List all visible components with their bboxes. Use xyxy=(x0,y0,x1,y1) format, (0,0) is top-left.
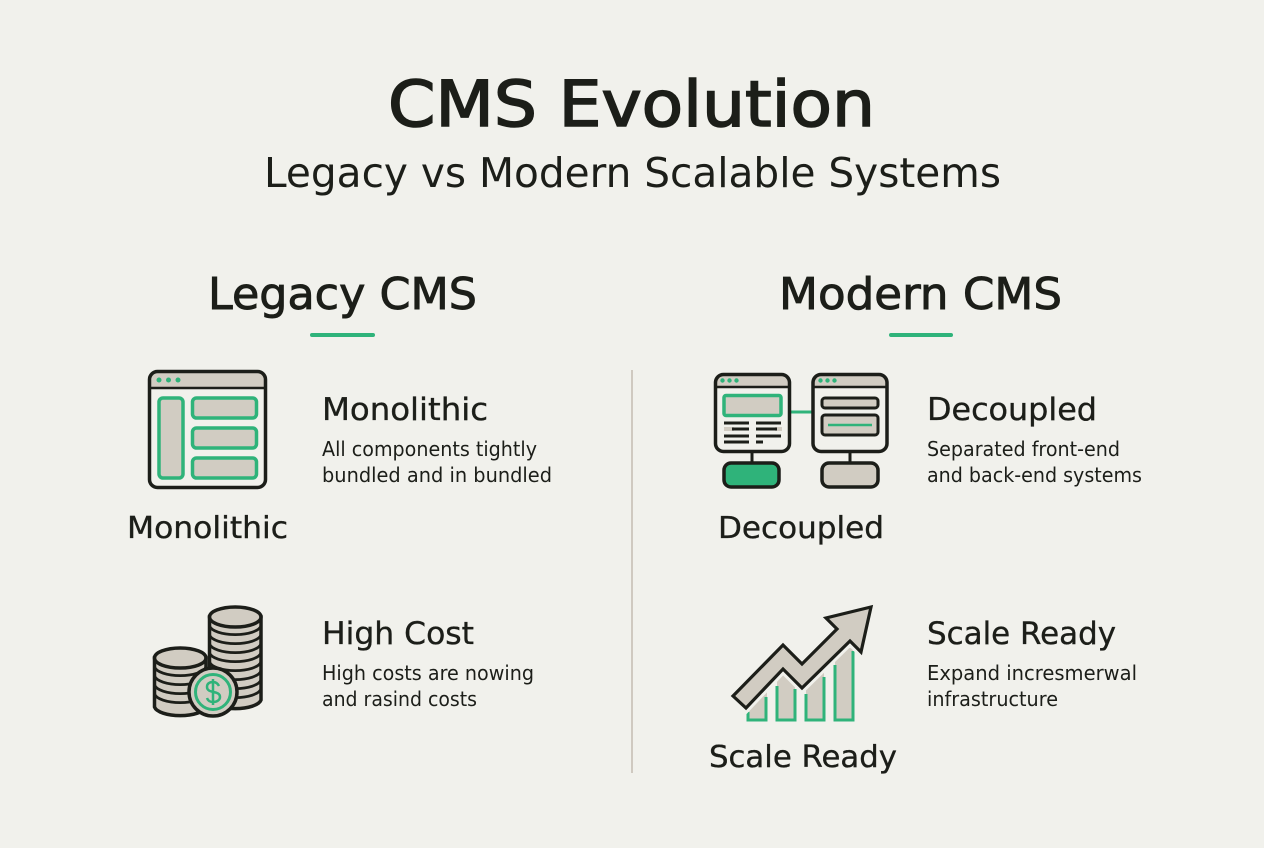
item text: Scale Ready xyxy=(927,661,1137,711)
item text: Monolithic: All components tightly xyxy=(322,437,537,461)
icon: coin stacks xyxy=(154,607,261,716)
heading underline xyxy=(889,333,953,337)
item text: Decoupled xyxy=(927,437,1142,487)
panel: legacy CMS xyxy=(127,269,552,716)
item heading: High Cost: High Cost xyxy=(322,616,474,652)
heading: Legacy CMS: Legacy CMS xyxy=(208,269,477,320)
item text: Scale Ready: infrastructure xyxy=(927,687,1058,711)
item text: Decoupled: and back-end systems xyxy=(927,463,1142,487)
icon: decoupled windows xyxy=(715,374,887,487)
heading: Modern CMS: Modern CMS xyxy=(779,269,1062,320)
item text: Monolithic: bundled and in bundled xyxy=(322,463,552,487)
icon label: Monolithic: Monolithic xyxy=(127,511,288,546)
item text: Scale Ready: Expand incresmerwal xyxy=(927,661,1137,685)
title: CMS Evolution xyxy=(388,68,875,141)
item heading: Decoupled: Decoupled xyxy=(927,392,1097,428)
item heading: Monolithic: Monolithic xyxy=(322,392,488,428)
panel: modern CMS xyxy=(709,269,1142,775)
subtitle: Legacy vs Modern Scalable Systems xyxy=(264,149,1001,197)
item text: Decoupled: Separated front-end xyxy=(927,437,1120,461)
icon: growth chart arrow xyxy=(733,607,871,720)
item heading: Scale Ready: Scale Ready xyxy=(927,616,1116,652)
heading underline xyxy=(310,333,375,337)
divider xyxy=(631,370,633,773)
icon: monolithic window xyxy=(149,371,266,488)
item text: High Cost xyxy=(322,661,534,711)
item text: High Cost: and rasind costs xyxy=(322,687,477,711)
item text: High Cost: High costs are nowing xyxy=(322,661,534,685)
icon label: Scale Ready: Scale Ready xyxy=(709,740,897,775)
icon label: Decoupled: Decoupled xyxy=(718,511,884,546)
item text: Monolithic xyxy=(322,437,552,487)
